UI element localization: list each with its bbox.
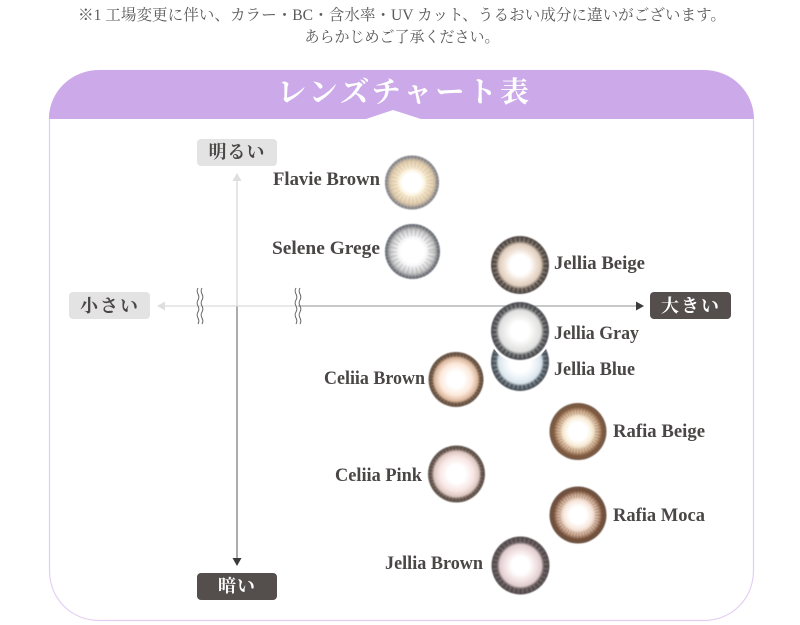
lens: Jellia Brown: Jellia Brown <box>385 554 484 574</box>
lens: Celiia Brown: Celiia Brown <box>324 369 426 389</box>
arrow up <box>232 173 242 181</box>
arrow left <box>157 302 165 310</box>
arrow right <box>636 302 644 310</box>
arrow down <box>232 558 242 566</box>
lens: Jellia Gray <box>488 302 640 363</box>
lens: Celiia Brown <box>324 352 484 407</box>
lens: Jellia Blue <box>491 333 635 391</box>
axis label: small <box>69 292 150 319</box>
axis label: dark <box>197 573 277 600</box>
panel: lens chart <box>49 70 754 620</box>
axis label: large <box>650 292 731 319</box>
horizontal axis small side <box>165 305 298 307</box>
axis label: small: 小さい <box>80 296 140 316</box>
footnote text: あらかじめご了承ください。 <box>304 28 500 46</box>
lens: Rafia Moca <box>550 486 705 544</box>
lens: Selene Grege <box>272 224 440 279</box>
axis label: dark: 暗い <box>218 576 256 596</box>
lens: Celiia Pink: Celiia Pink <box>335 466 423 486</box>
lens: Rafia Moca: Rafia Moca <box>613 506 705 526</box>
lens: Jellia Beige: Jellia Beige <box>554 254 645 274</box>
lens: Jellia Beige <box>491 236 645 294</box>
lens: Jellia Brown <box>385 536 550 594</box>
header band <box>49 70 754 119</box>
vertical axis bright side <box>236 180 238 306</box>
axis break right <box>295 288 301 324</box>
lens: Rafia Beige: Rafia Beige <box>613 422 705 442</box>
lens: Rafia Beige <box>550 403 705 460</box>
vertical axis dark side <box>236 306 238 560</box>
horizontal axis large side <box>298 305 636 307</box>
footnote text: ※1 工場変更に伴い、カラー・BC・含水率・UV カット、うるおい成分に違いがございます。 <box>78 6 726 24</box>
lens: Selene Grege: Selene Grege <box>272 239 380 259</box>
lens: Flavie Brown <box>273 156 439 210</box>
chart axes <box>157 173 644 566</box>
lens: Jellia Gray: Jellia Gray <box>554 324 640 344</box>
axis label: bright: 明るい <box>208 142 266 162</box>
heading: レンズチャート表 <box>277 76 529 109</box>
axis break left <box>197 288 203 324</box>
axis label: large: 大きい <box>661 296 721 316</box>
lens: Celiia Pink <box>335 446 485 502</box>
lens: Flavie Brown: Flavie Brown <box>273 170 381 190</box>
footnote text <box>78 6 726 46</box>
panel outline <box>50 70 754 620</box>
lens: Jellia Blue: Jellia Blue <box>554 360 635 380</box>
axis label: bright <box>197 139 277 166</box>
